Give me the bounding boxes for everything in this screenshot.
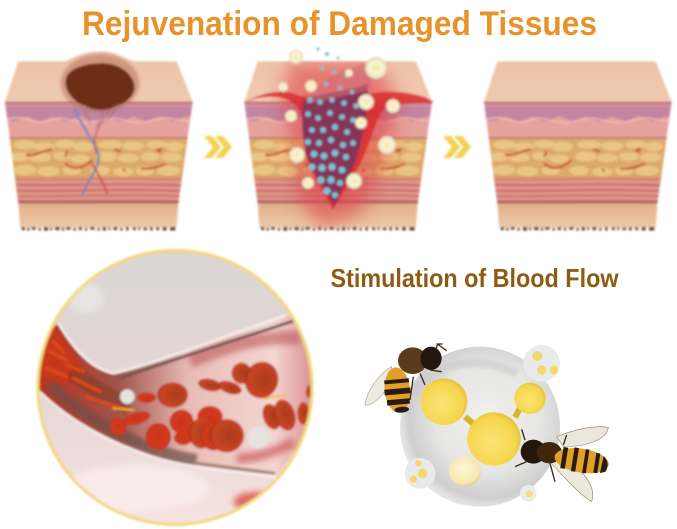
- icon: glass orb: [400, 347, 560, 507]
- icon: golden pearls: [278, 50, 400, 189]
- skin diagrams row: [0, 47, 677, 231]
- subheading: Stimulation of Blood Flow: [330, 263, 619, 293]
- arrow: second chevrons: [443, 136, 471, 158]
- icon: golden molecule: [421, 378, 546, 487]
- icon: blood vessels: [75, 108, 117, 195]
- panel: healing skin with particles: [239, 47, 439, 231]
- arrow: first chevrons: [204, 136, 232, 158]
- red cell mass at vessel entrance: [40, 325, 83, 385]
- panel: blood vessel circle: [33, 250, 317, 524]
- icon: upper bee: [365, 344, 447, 414]
- vessel walls: [40, 315, 293, 477]
- vessel interior: [33, 315, 317, 477]
- icon: blue healing particles: [305, 47, 359, 198]
- title: Rejuvenation of Damaged Tissues: [82, 5, 597, 43]
- icon: small bubbles: [405, 345, 560, 502]
- white blood cells: [120, 389, 269, 449]
- background highlights: [72, 284, 264, 510]
- glow streaks: [47, 342, 287, 410]
- icon: lower bee: [515, 427, 611, 502]
- panel: restored skin: [479, 61, 677, 231]
- wound redness: [244, 62, 434, 228]
- icon: dark wound: [61, 54, 139, 113]
- skin bump around wound: [63, 51, 137, 62]
- panel: bees and molecule: [365, 344, 611, 507]
- panel: damaged skin with wound: [0, 51, 200, 231]
- red blood cells: [110, 358, 313, 452]
